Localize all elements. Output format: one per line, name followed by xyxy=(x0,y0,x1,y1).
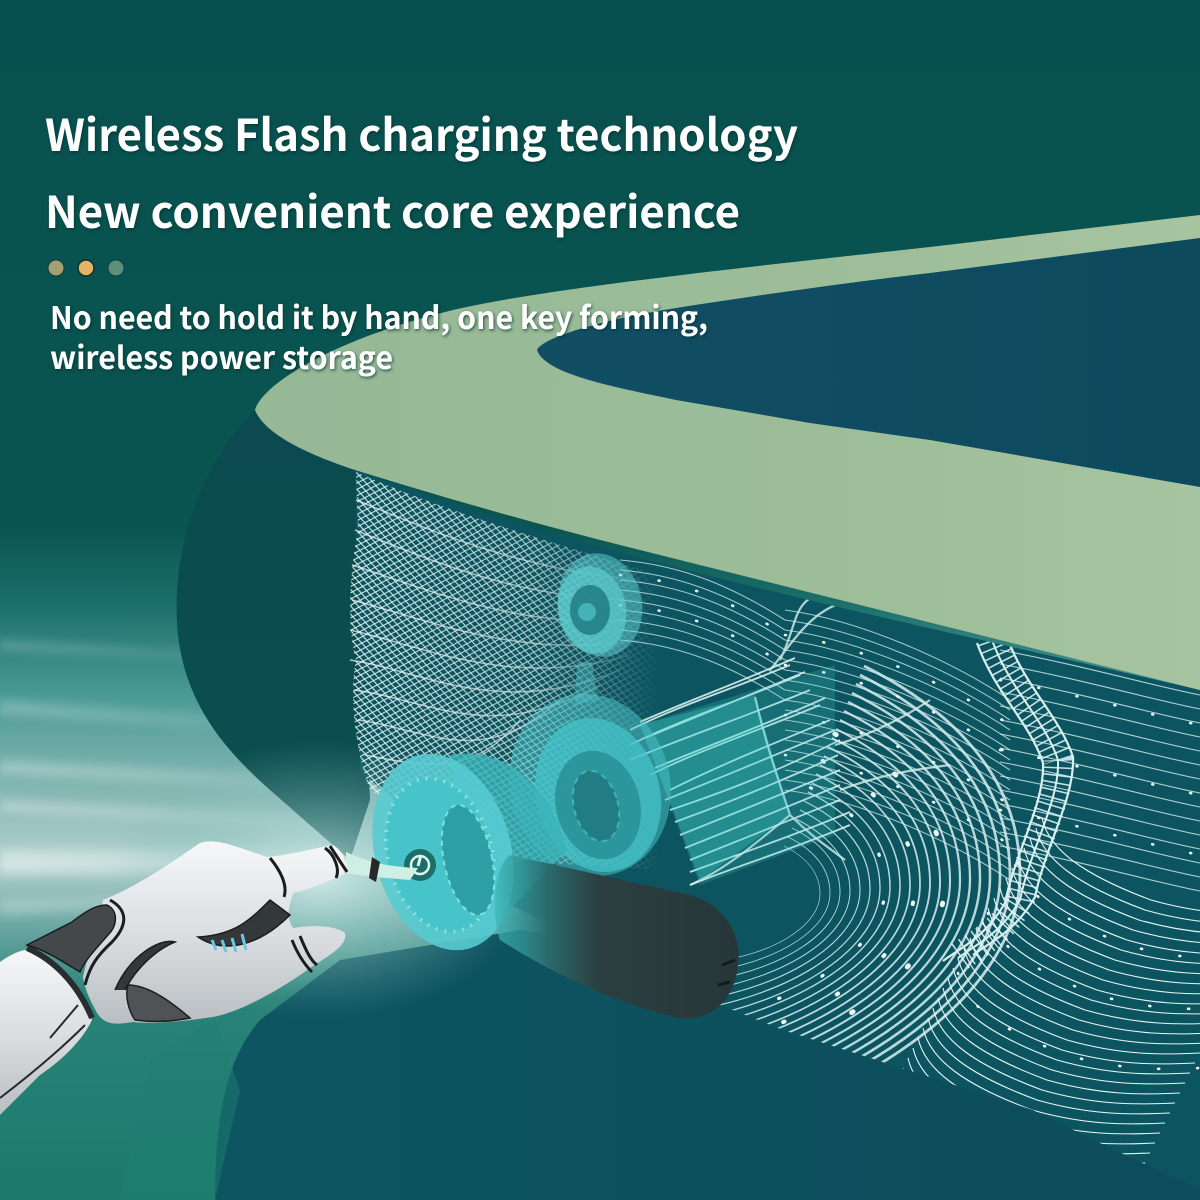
device: black pill body xyxy=(495,855,739,1018)
lower right sweeping lines xyxy=(893,818,1200,1184)
right side lines xyxy=(1000,650,1200,891)
wave mesh: left net xyxy=(350,472,660,870)
dark pool body xyxy=(177,410,370,860)
description text xyxy=(50,293,708,378)
pool wall xyxy=(355,470,1200,1190)
device: front disc xyxy=(351,738,567,966)
finger joints xyxy=(270,846,347,972)
palm and fingers xyxy=(83,841,347,1024)
braided net band xyxy=(943,637,1073,961)
description text: wireless power storage xyxy=(50,333,393,378)
device: rear disc xyxy=(489,675,691,895)
forearm xyxy=(0,950,92,1115)
index fingertip light xyxy=(346,852,418,880)
dark wrist plate xyxy=(27,905,115,972)
thumb groove xyxy=(115,900,290,990)
title: New convenient core experience xyxy=(45,177,740,241)
device: back suction cup xyxy=(550,546,650,705)
lower left floor wedge xyxy=(120,1018,240,1200)
pool rim xyxy=(255,215,1200,690)
blue joint stripes xyxy=(212,934,246,952)
three decorative dots xyxy=(48,260,124,276)
wrist lines xyxy=(85,900,124,985)
upper fan of lines xyxy=(620,560,1010,880)
wave mesh: flowing lines xyxy=(604,560,1200,1184)
finger tip band xyxy=(369,857,380,882)
teal light block behind lines xyxy=(640,665,835,885)
device: pill end details xyxy=(718,960,735,985)
device glow xyxy=(110,740,530,1020)
scattered dots xyxy=(620,575,1200,1085)
bright strands into teal block xyxy=(630,658,850,885)
concentric arcs around device xyxy=(720,664,1022,1063)
dark palm plate xyxy=(127,985,190,1021)
title: Wireless Flash charging technology xyxy=(45,100,798,164)
title xyxy=(45,100,798,241)
wrist joint band xyxy=(27,948,92,1018)
robotic hand xyxy=(0,841,418,1115)
pool water xyxy=(537,238,1200,487)
description text: No need to hold it by hand, one key forming, xyxy=(50,293,708,338)
forearm trim xyxy=(0,1005,85,1098)
light streaks from left xyxy=(0,640,419,914)
device: power button xyxy=(404,849,436,881)
pool floor shadow xyxy=(215,930,1200,1200)
